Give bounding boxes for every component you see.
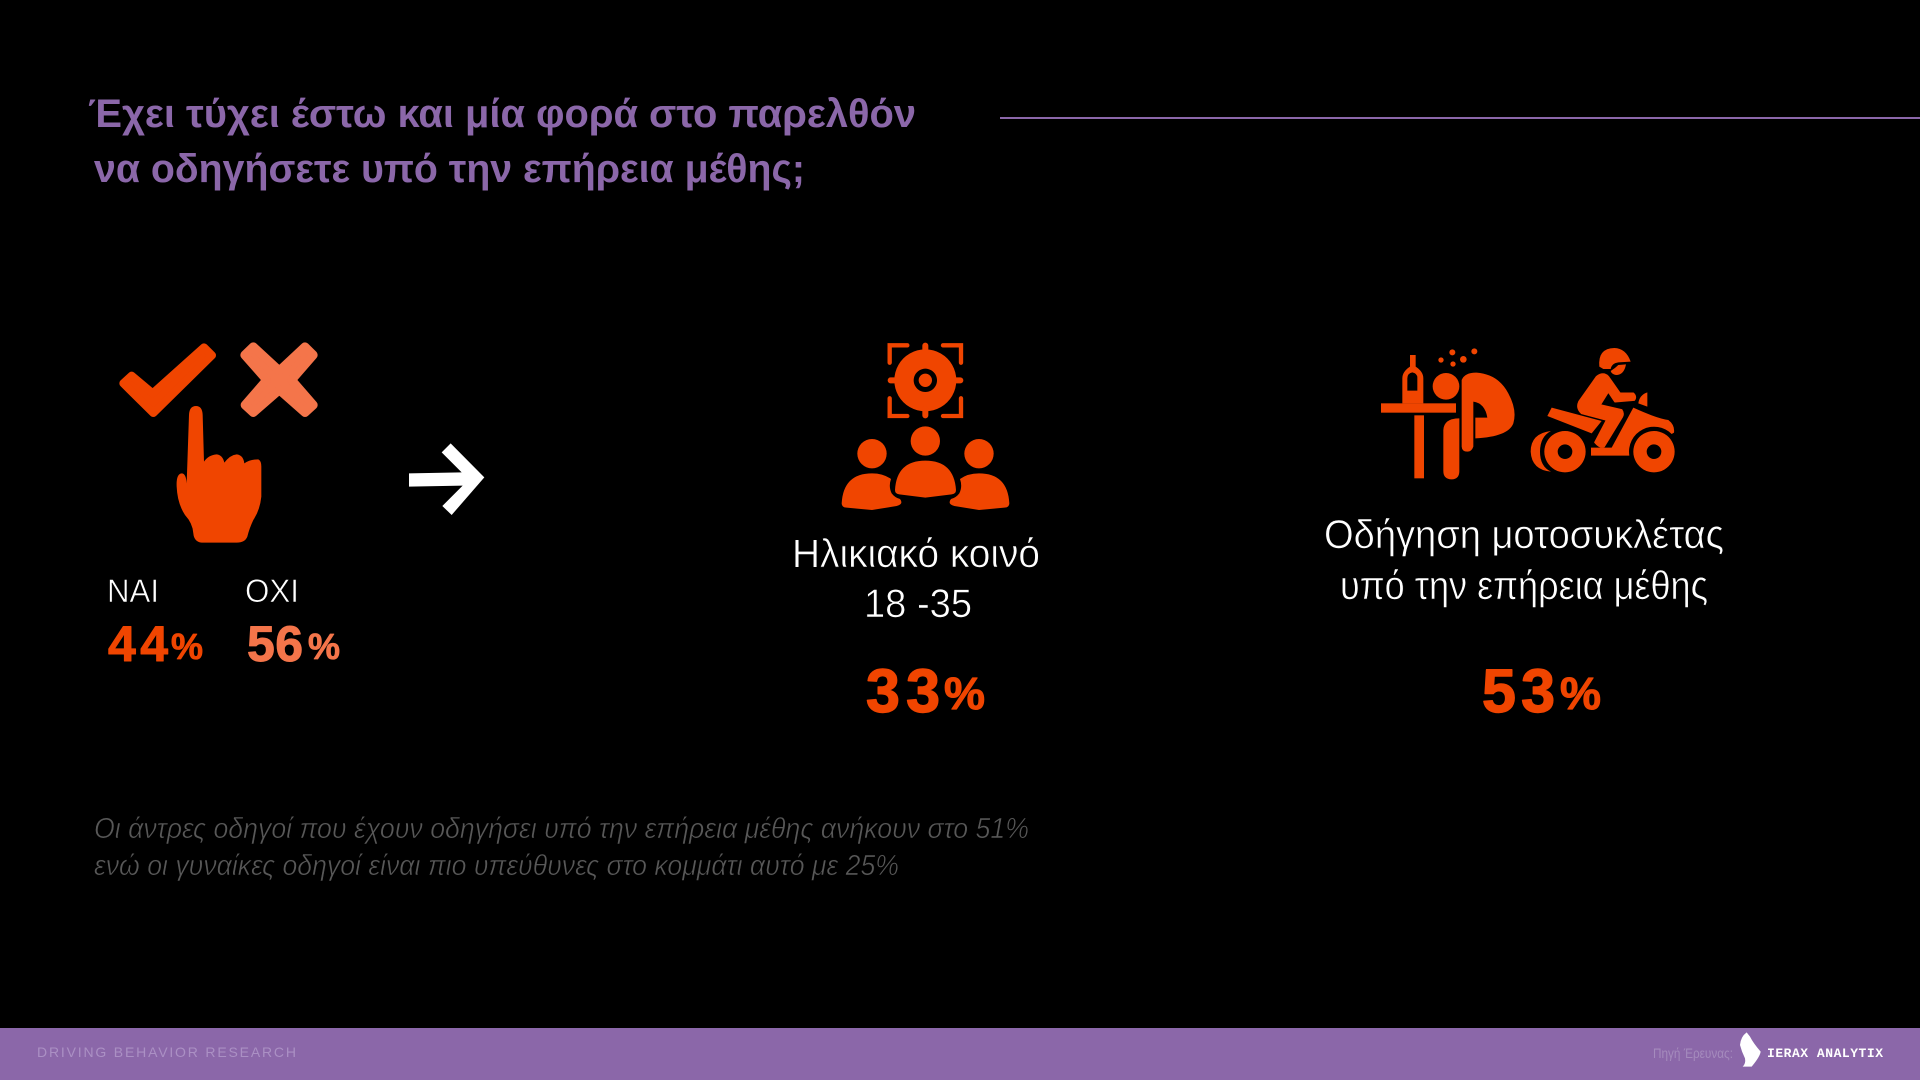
value: 44%: 44 <box>108 616 168 672</box>
panel: age group <box>792 345 1040 725</box>
label: age group: Ηλικιακό κοινό <box>792 532 1040 576</box>
footer bar <box>0 1028 1920 1080</box>
value: 56%: % <box>308 626 340 667</box>
label: motorcycle riding under the influence <box>1324 513 1724 608</box>
label: motorcycle riding under the influence: Οδήγηση μοτοσυκλέτας <box>1324 513 1724 557</box>
value: 44%: % <box>171 626 203 667</box>
panel: yes or no <box>107 347 340 672</box>
value: 53%: % <box>1560 668 1601 719</box>
label: age group <box>792 532 1040 626</box>
value: 53%: 53 <box>1482 657 1555 725</box>
label: NAI: NAI <box>107 573 159 609</box>
title: Έχει τύχει έστω και μία φορά στο παρελθόν <box>88 92 916 136</box>
value: 33%: % <box>944 668 985 719</box>
value: 33% <box>866 657 985 725</box>
title: να οδηγήσετε υπό την επήρεια μέθης; <box>94 147 805 191</box>
footer: source label: Πηγή Έρευνας: <box>1653 1045 1733 1061</box>
value: 56% <box>247 616 340 672</box>
label: age group: 18 -35 <box>864 582 972 626</box>
value: 33%: 33 <box>866 657 940 725</box>
icon: motorcycle rider <box>1531 348 1675 472</box>
footer: company name: IERAX ANALYTIX <box>1767 1046 1883 1061</box>
icon: cross mark <box>245 347 313 413</box>
footer: research name: DRIVING BEHAVIOR RESEARCH <box>37 1044 296 1060</box>
text block: gender note: Οι άντρες οδηγοί που έχουν οδηγήσει υπό την επήρεια μέθης ανήκουν στο 51% <box>94 813 1029 845</box>
value: 44% <box>108 616 203 672</box>
panel: motorcycle <box>1324 348 1724 725</box>
label: motorcycle riding under the influence: υπό την επήρεια μέθης <box>1340 564 1708 608</box>
icon: pointing hand <box>177 406 261 543</box>
icon: check mark <box>123 347 212 413</box>
value: 53% <box>1482 657 1601 725</box>
icon: target audience <box>842 345 1009 510</box>
text block: gender note: ενώ οι γυναίκες οδηγοί είναι πιο υπεύθυνες στο κομμάτι αυτό με 25% <box>94 850 899 882</box>
label: OXI: OXI <box>245 573 299 609</box>
value: 56%: 56 <box>247 616 303 672</box>
arrow <box>409 443 484 515</box>
icon: drunk person at table <box>1381 348 1515 479</box>
text block: gender note <box>94 813 1029 882</box>
title <box>88 92 916 191</box>
icon: bird logo <box>1740 1032 1761 1067</box>
